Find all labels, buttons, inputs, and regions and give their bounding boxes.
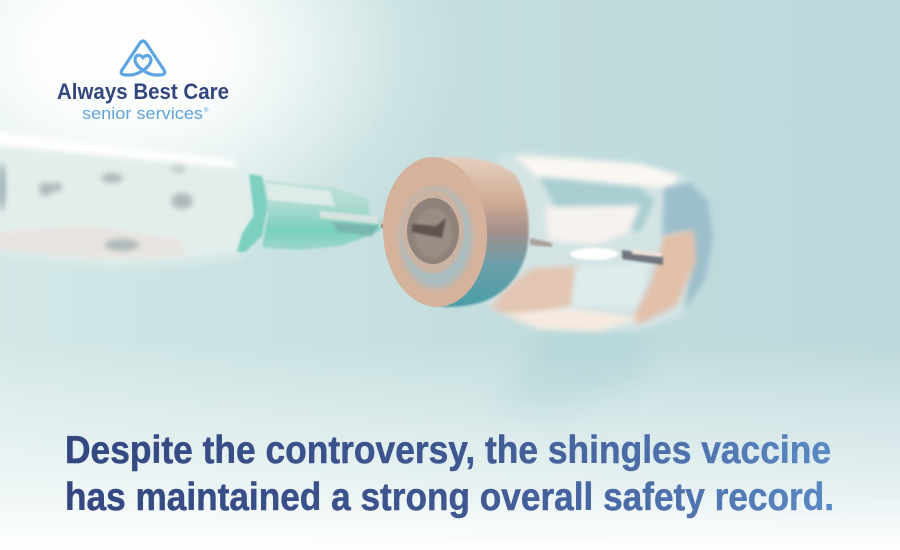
- headline: [65, 429, 834, 519]
- cap front face: [379, 154, 491, 310]
- photo: vial: [488, 152, 714, 331]
- company name: Always Best Care: [57, 79, 229, 104]
- logo: [57, 41, 229, 123]
- photo: needle hub: [237, 174, 380, 252]
- headline line 1: Despite the controversy, the shingles vaccine: [65, 429, 831, 472]
- tagline: senior services: [82, 104, 203, 123]
- photo: vial reflection: [490, 335, 650, 420]
- icon: triangle with heart: [121, 41, 165, 75]
- bottom fade: [0, 340, 900, 550]
- photo: syringe barrel: [0, 131, 258, 264]
- registered mark: ®: [204, 107, 209, 114]
- photo: vial cap: [379, 154, 529, 310]
- stopper: [407, 198, 459, 264]
- photo: needle: [381, 221, 414, 232]
- headline line 2: has maintained a strong overall safety record.: [65, 476, 834, 519]
